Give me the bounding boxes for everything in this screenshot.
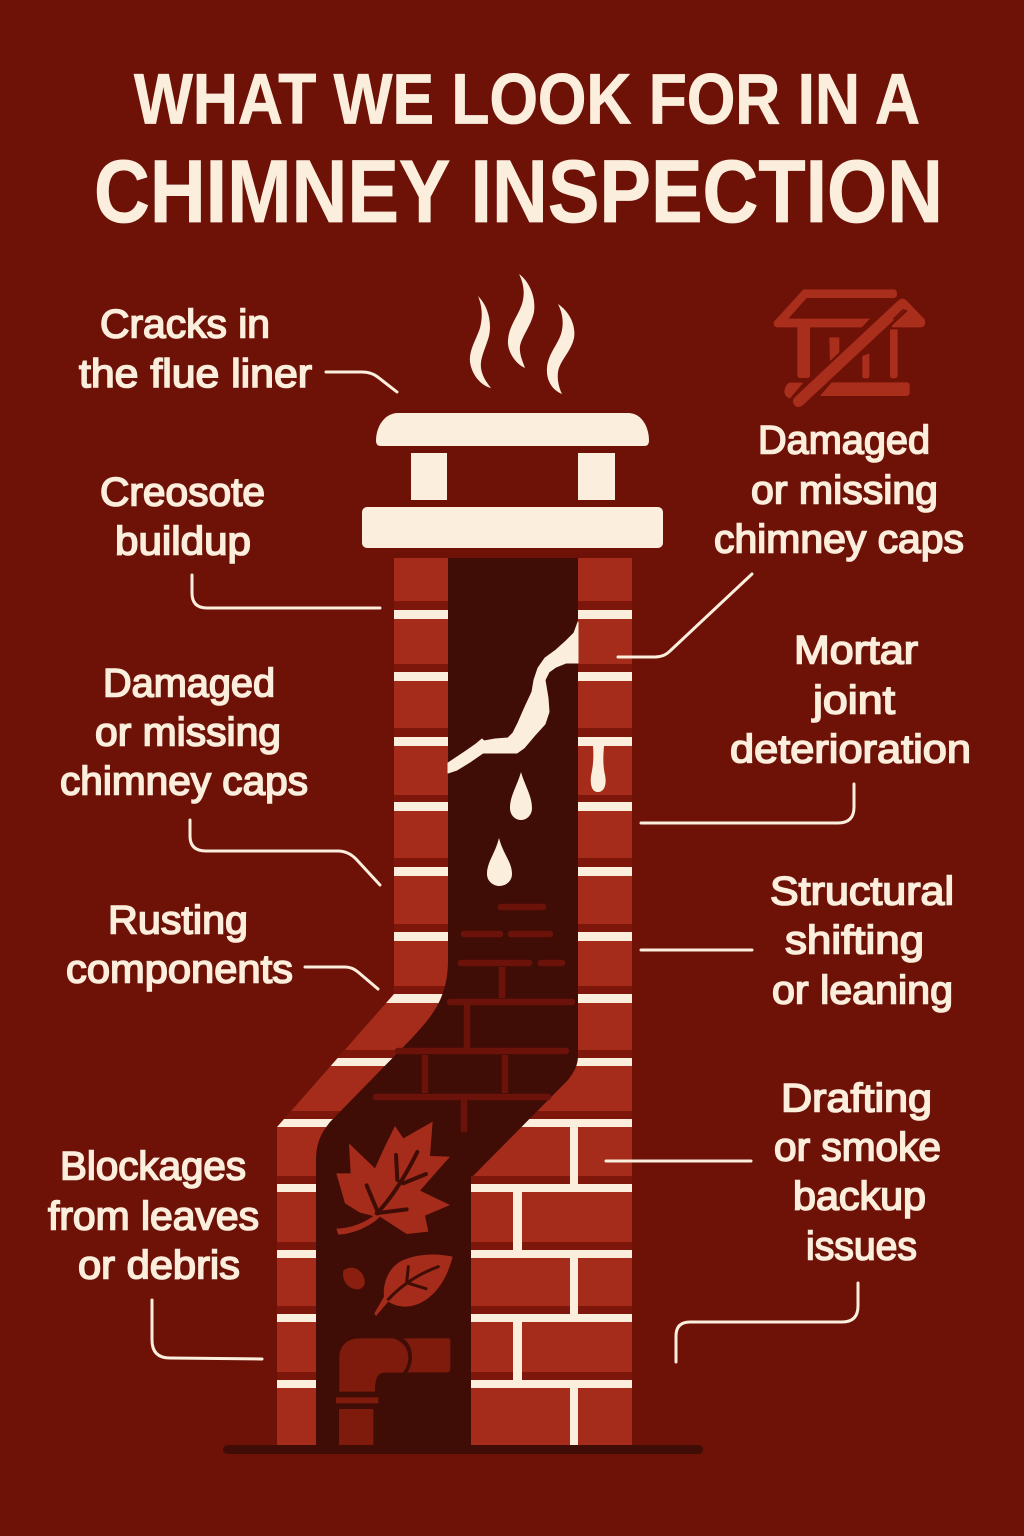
- water drops: [487, 772, 532, 886]
- ground line: [223, 1445, 703, 1454]
- icon: rusted pipe: [336, 1338, 450, 1445]
- label: rusting components: [66, 898, 378, 992]
- label: blockages from leaves or debris: [48, 1144, 262, 1359]
- label: damaged or missing chimney caps, right: chimney caps: [714, 518, 964, 562]
- label: structural shifting or leaning: or leaning: [772, 968, 953, 1012]
- chimney cap: [362, 413, 663, 548]
- flue crack: [448, 622, 578, 773]
- label: creosote buildup: Creosote: [100, 470, 265, 514]
- label: blockages from leaves or debris: Blockages: [60, 1144, 246, 1188]
- icon: maple leaf: [336, 1122, 450, 1235]
- label: drafting or smoke backup issues: [606, 1076, 941, 1362]
- label: damaged or missing chimney caps, left: or missing: [95, 710, 281, 754]
- label: cracks in the flue liner: the flue liner: [79, 352, 312, 396]
- label: drafting or smoke backup issues: backup: [793, 1174, 926, 1218]
- label: drafting or smoke backup issues: or smoke: [774, 1126, 941, 1170]
- title: [94, 60, 943, 241]
- label: damaged or missing chimney caps, right: [618, 418, 964, 657]
- label: structural shifting or leaning: [641, 870, 954, 1012]
- label: damaged or missing chimney caps, left: [60, 662, 380, 885]
- icon: smoke: [470, 274, 574, 394]
- icon: crossed-out chimney cap: [774, 289, 925, 402]
- brick chimney body: [270, 558, 640, 1448]
- label: rusting components: Rusting: [108, 898, 248, 942]
- flue interior: [316, 558, 578, 1445]
- icon: debris fragment: [343, 1268, 365, 1289]
- label: structural shifting or leaning: Structural: [770, 870, 954, 914]
- label: damaged or missing chimney caps, right: Damaged: [758, 418, 930, 462]
- label: blockages from leaves or debris: or debris: [78, 1244, 240, 1288]
- label: cracks in the flue liner: Cracks in: [100, 302, 270, 346]
- title: WHAT WE LOOK FOR IN A: [134, 60, 920, 140]
- label: damaged or missing chimney caps, left: chimney caps: [60, 760, 308, 804]
- label: structural shifting or leaning: shifting: [785, 918, 924, 962]
- label: mortar joint deterioration: joint: [812, 678, 895, 722]
- chimney illustration: [223, 274, 703, 1454]
- label: drafting or smoke backup issues: Drafting: [781, 1076, 932, 1120]
- label: damaged or missing chimney caps, right: or missing: [751, 468, 938, 512]
- faint inner bricks: [376, 907, 572, 1132]
- label: cracks in the flue liner: [79, 302, 397, 396]
- label: mortar joint deterioration: Mortar: [794, 628, 918, 672]
- icon: small leaf: [374, 1254, 453, 1316]
- label: blockages from leaves or debris: from leaves: [48, 1194, 259, 1238]
- label: rusting components: components: [66, 948, 293, 992]
- label: damaged or missing chimney caps, left: Damaged: [103, 662, 275, 706]
- debris in flue: [336, 1122, 453, 1445]
- label: mortar joint deterioration: [641, 628, 971, 823]
- label: mortar joint deterioration: deterioration: [730, 728, 971, 772]
- label: creosote buildup: buildup: [115, 520, 251, 564]
- mortar drip: [591, 746, 606, 792]
- label: creosote buildup: [100, 470, 380, 608]
- label: drafting or smoke backup issues: issues: [806, 1224, 917, 1268]
